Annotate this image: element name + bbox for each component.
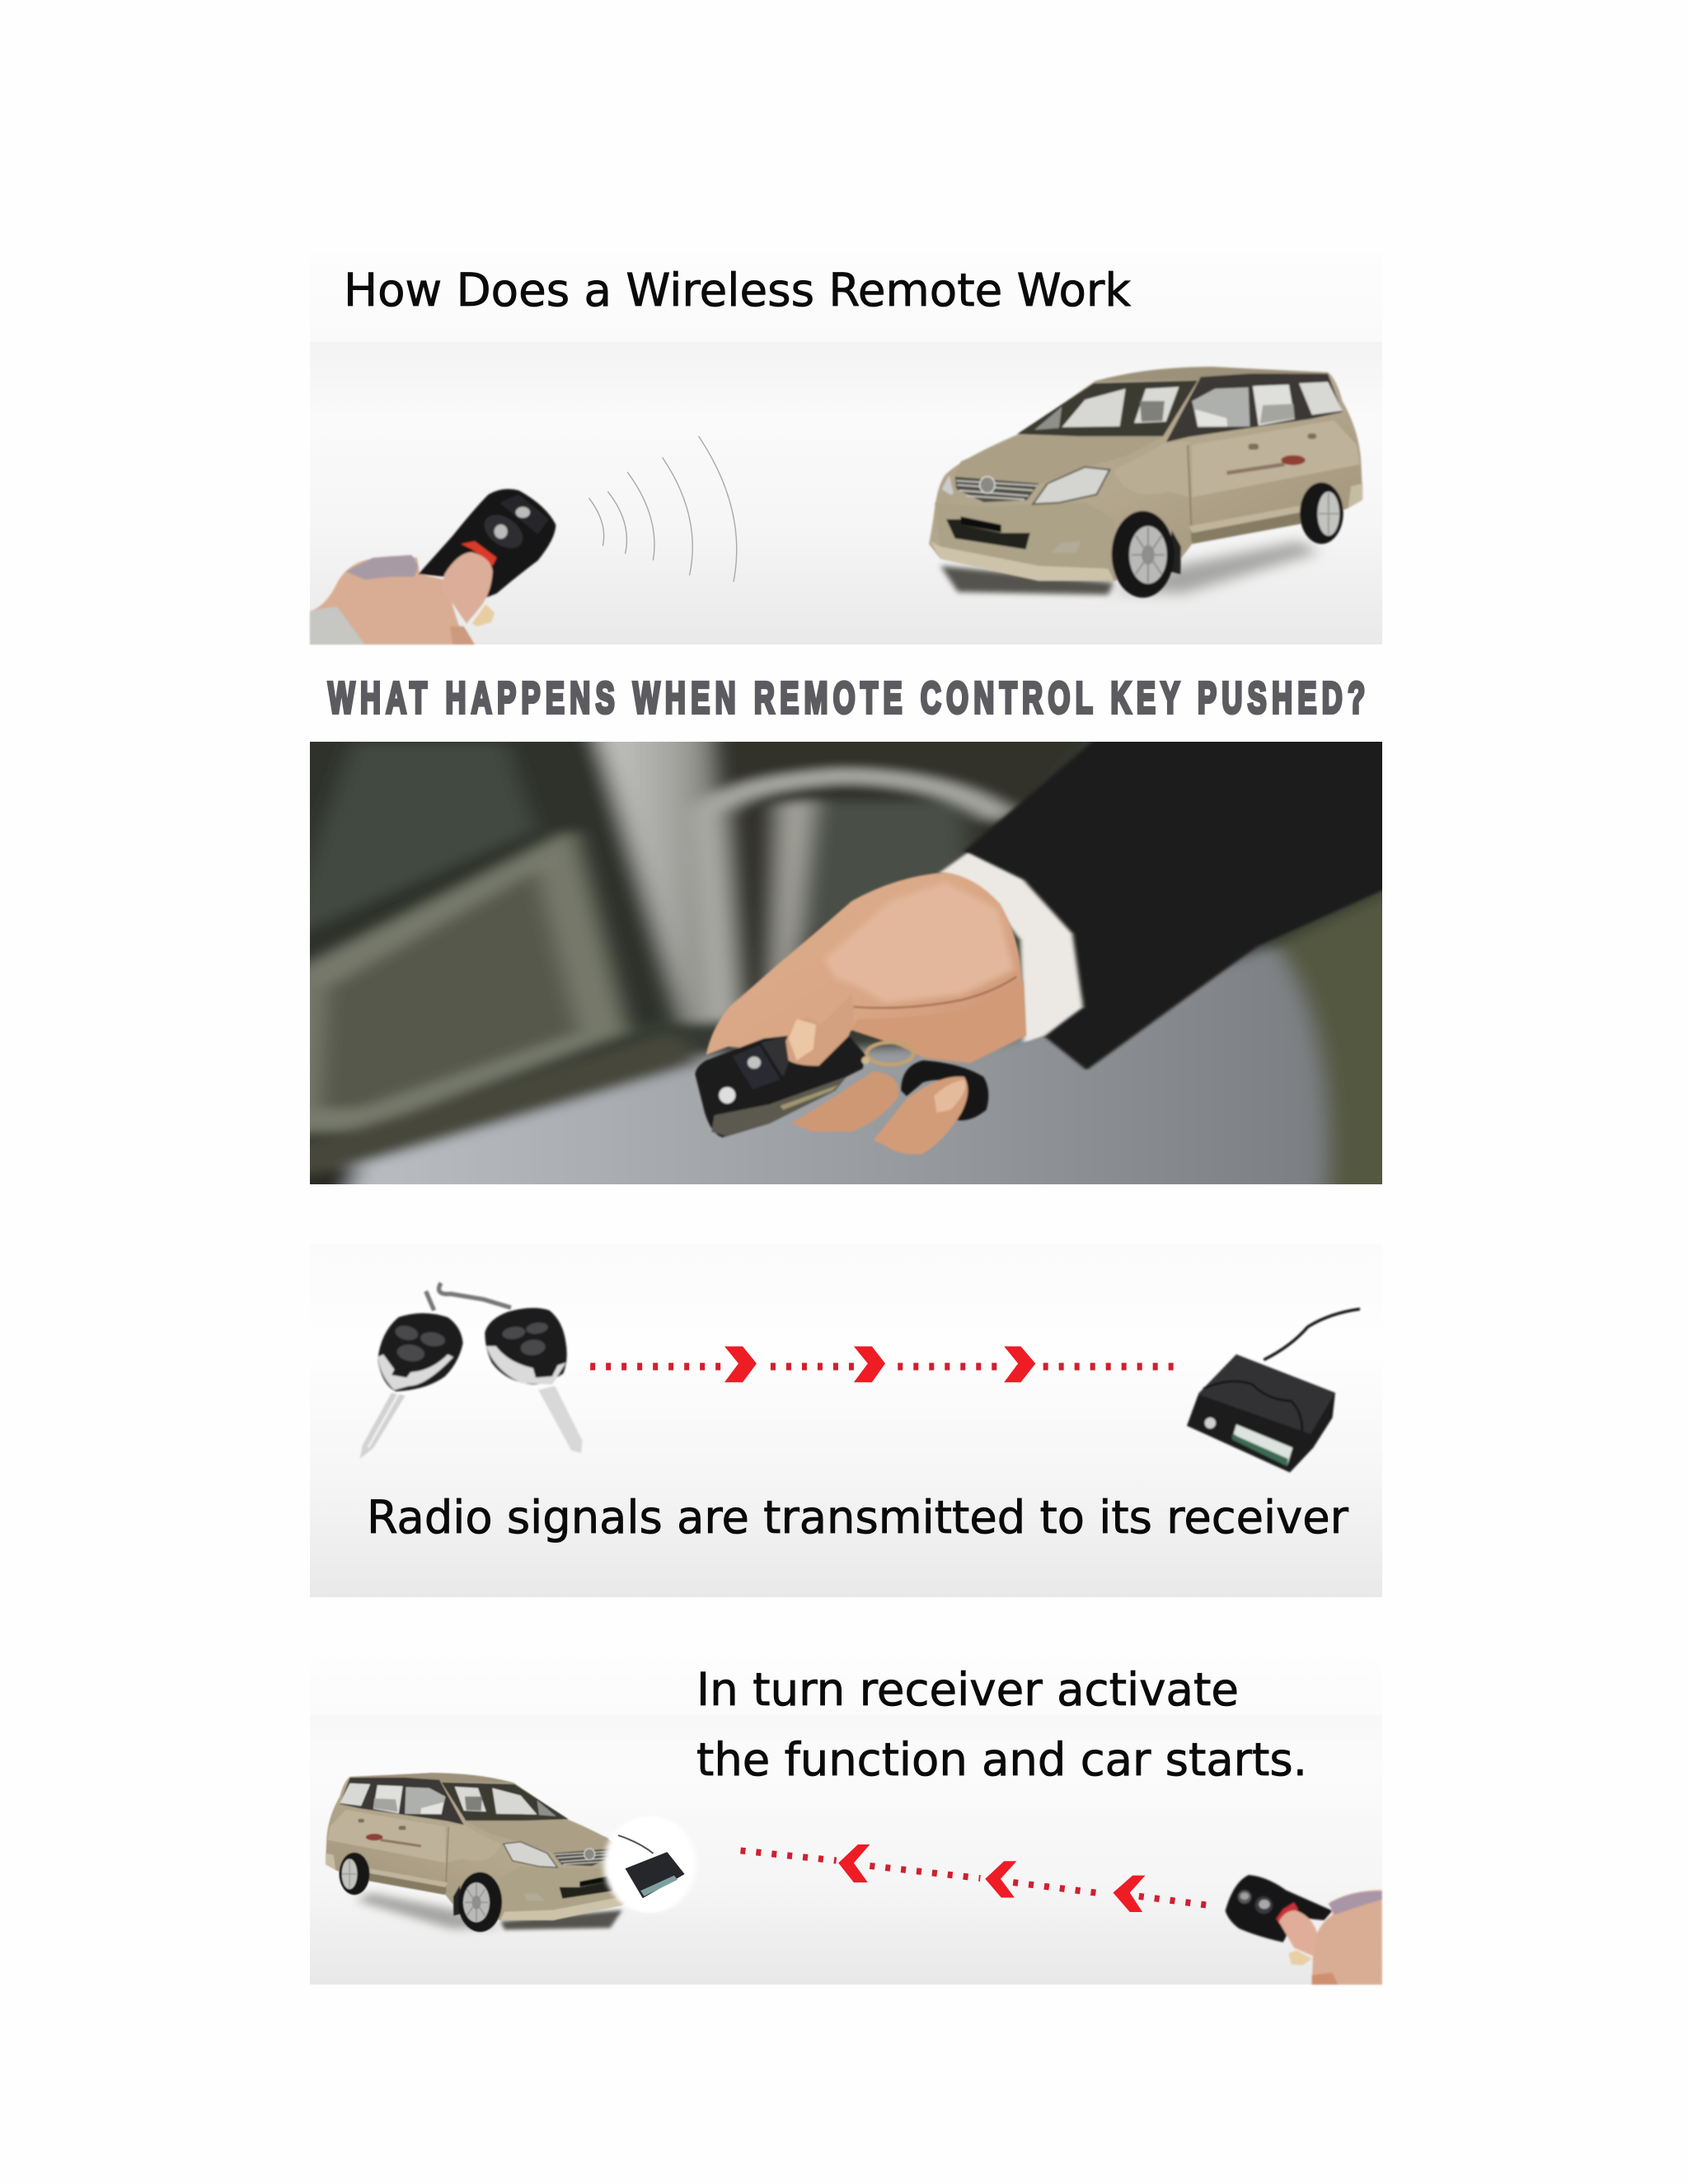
suit sleeve xyxy=(964,734,1415,1070)
panel background xyxy=(310,253,1382,644)
arrow: signal dots pointing right xyxy=(590,1347,1183,1382)
panel: radio signals xyxy=(310,1244,1382,1597)
illustration: hand holding remote xyxy=(310,489,556,644)
icon: signal waves xyxy=(588,436,737,582)
arrow: signal dots pointing left xyxy=(740,1844,1214,1912)
icon: receiver box xyxy=(1187,1309,1360,1473)
panel: receiver activates the car xyxy=(310,1646,1382,1985)
title: How Does a Wireless Remote Work xyxy=(344,264,1131,316)
illustration: car xyxy=(929,367,1362,598)
caption: In turn receiver activate xyxy=(696,1663,1239,1716)
blurred car background xyxy=(310,742,1382,1184)
hand holding key fob xyxy=(695,872,1026,1155)
caption: Radio signals are transmitted to its receiver xyxy=(367,1491,1348,1544)
icon: receiver on car xyxy=(603,1816,696,1913)
illustration: car facing right xyxy=(326,1773,631,1932)
caption: the function and car starts. xyxy=(696,1733,1307,1786)
shirt cuff xyxy=(940,852,1083,1043)
heading: what happens: WHAT HAPPENS WHEN REMOTE CONTROL KEY PUSHED? xyxy=(328,673,1365,723)
panel background xyxy=(310,1244,1382,1597)
caption xyxy=(696,1663,1307,1786)
panel background xyxy=(310,1646,1382,1985)
panel: photo of hand pressing key fob beside car xyxy=(310,742,1382,1184)
icon: pair of car keys xyxy=(360,1283,583,1459)
panel: how a wireless remote works xyxy=(310,253,1382,644)
illustration: hand holding remote xyxy=(1226,1875,1382,1985)
